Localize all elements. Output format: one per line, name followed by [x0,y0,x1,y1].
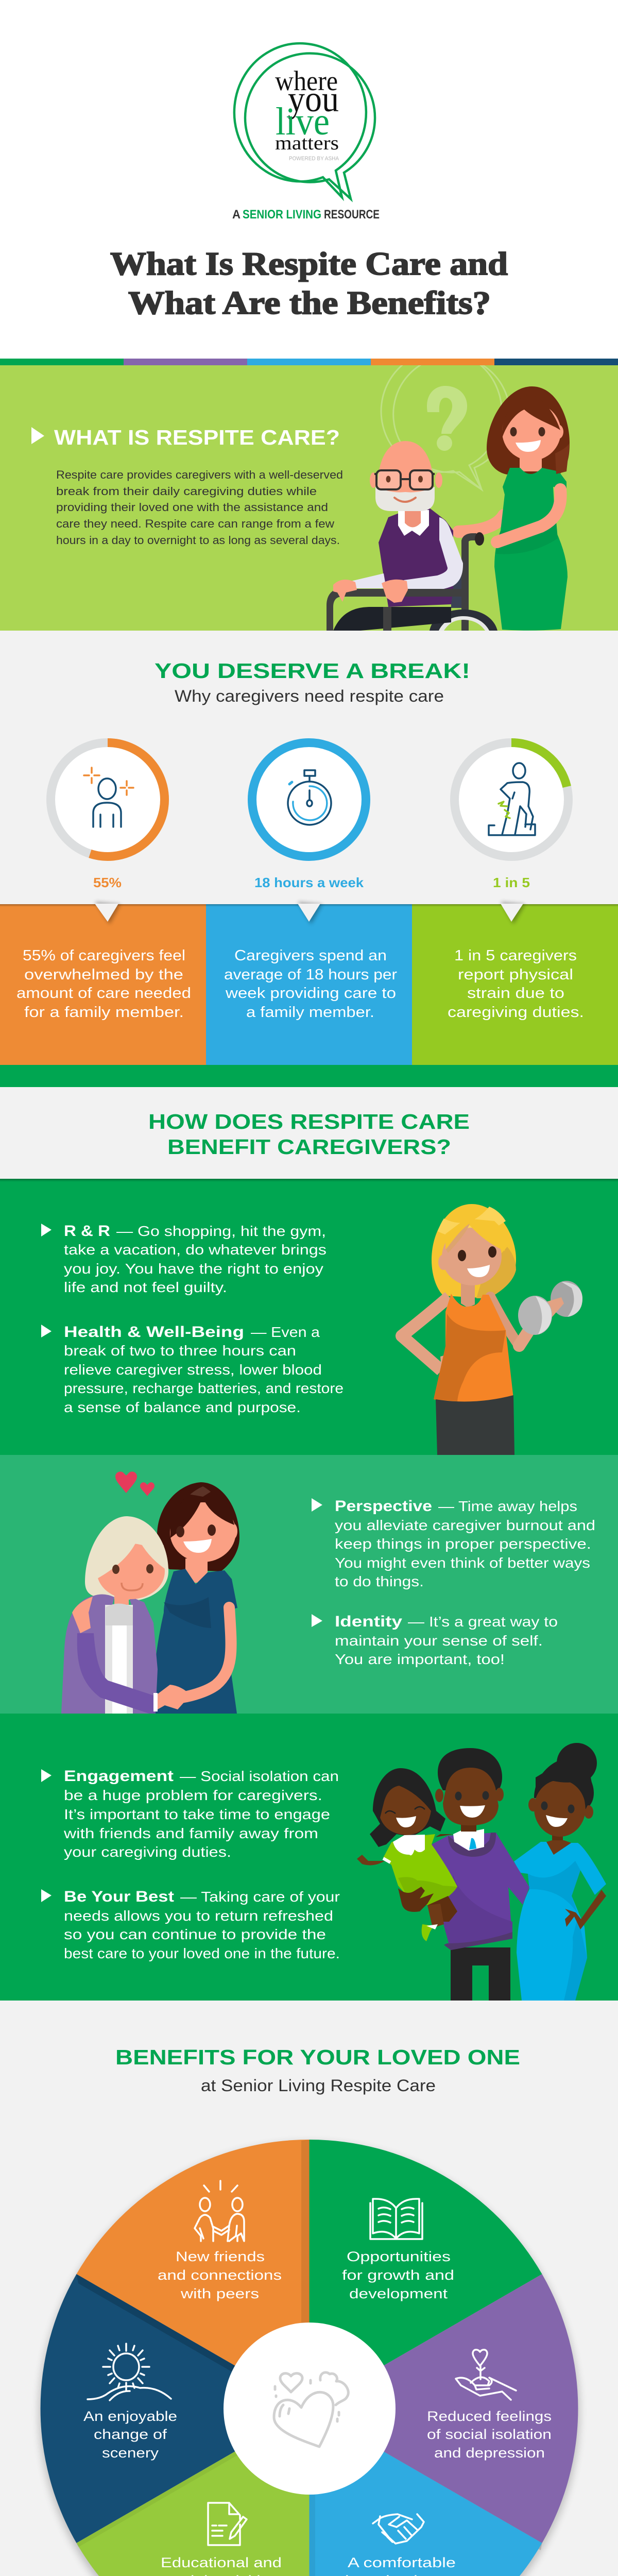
logo: SENIOR LIVING [243,208,321,222]
title: What Are the Benefits? [128,285,491,321]
segment: reduced feelings: of social isolation [427,2427,552,2442]
text: engagement: your caregiving duties. [64,1844,231,1860]
text: engagement: with friends and family away from [63,1825,318,1841]
text: 1 in 5: strain due to [467,985,564,1002]
color bar [0,359,618,365]
text: perspective: — Time away helps [438,1498,577,1514]
text: engagement [41,1768,339,1860]
woman [557,1743,597,1783]
text: identity: Identity [335,1613,402,1630]
icon: hearts [274,2372,348,2447]
text: 55%: amount of care needed [16,985,191,1002]
text: identity: maintain your sense of self. [335,1633,543,1649]
donut: 18 hours a week: 18 hours a week [254,875,364,890]
icon: sun over hill [88,2344,171,2400]
text: health and well-being: relieve caregiver stress, lower blood [64,1362,322,1378]
center circle [224,2323,396,2495]
panel: how does respite care heading [0,1087,618,1179]
icon: book [370,2199,422,2239]
donut: 55% [50,743,165,890]
text: 1 in 5: 1 in 5 caregivers [454,947,577,964]
panel: benefits for your loved one [0,2001,618,2576]
segment: opportunities [309,2140,542,2409]
logo: live [276,100,330,143]
text: engagement: Engagement [64,1768,174,1785]
text: perspective: keep things in proper perspective. [335,1536,591,1552]
wheelchair [451,562,466,608]
text block: hours in a day to overnight to as long as several days. [56,534,340,547]
text: be your best: needs allows you to return refreshed [64,1908,333,1924]
text: health and well-being: — Even a [251,1324,320,1340]
segment: new friends: and connections [158,2267,282,2283]
text block: care they need. Respite care can range from a few [56,517,334,530]
text: engagement: It’s important to take time to engage [64,1806,330,1822]
man [451,1947,510,2001]
illustration: woman with dumbbell [402,1204,582,1455]
text block: Respite care provides caregivers with a well-deserved [56,468,343,481]
segment: new friends [76,2140,309,2409]
text: health and well-being: a sense of balance and purpose. [64,1399,301,1415]
icon: hearts [115,1471,154,1496]
text: identity: — It’s a great way to [408,1614,558,1630]
text: 55%: for a family member. [24,1004,184,1021]
segment: scenery [41,2274,309,2543]
text: perspective: You might even think of better ways [335,1555,590,1571]
logo: where [275,65,338,96]
icon: stopwatch [288,770,331,825]
panel: stat columns [0,902,618,1065]
segment: scenery: scenery [102,2445,159,2461]
icon: overwhelmed person [84,768,133,827]
wheel [39,2140,579,2576]
band [0,1065,618,1087]
text: perspective: you alleviate caregiver burnout and [335,1517,595,1533]
text: health and well-being: pressure, recharge batteries, and restore [64,1380,344,1396]
text: health and well-being: Health & Well-Being [64,1324,244,1341]
segment: reduced feelings: Reduced feelings [427,2409,552,2424]
text: be your best: — Taking care of your [180,1889,340,1905]
logo [232,43,380,222]
girl [435,1834,453,1837]
man [379,508,453,607]
text: R and R [41,1223,327,1295]
text: engagement: be a huge problem for caregivers. [64,1787,322,1803]
segment: new friends: New friends [176,2249,265,2264]
text: R and R: take a vacation, do whatever brings [64,1242,327,1258]
text: 18 hours: Caregivers spend an [234,947,387,964]
donut: 1 in 5: 1 in 5 [493,875,530,890]
text: 1 in 5 [448,947,584,1021]
heading: YOU DESERVE A BREAK! [154,659,470,683]
text: be your best: so you can continue to provide the [64,1926,326,1942]
text: 55% [16,947,191,1021]
segment: opportunities: development [349,2286,448,2301]
segment: educational: Educational and [161,2555,282,2570]
segment: comfortable introduction: A comfortable [348,2555,456,2570]
heading: WHAT IS RESPITE CARE? [54,426,340,449]
icon: friends [195,2181,244,2241]
segment: new friends: with peers [180,2286,259,2301]
illustration: family [357,1743,606,2001]
text: health and well-being: break of two to three hours can [64,1343,296,1359]
text: be your best [41,1888,340,1961]
text: be your best: best care to your loved one in the future. [64,1945,340,1961]
panel: how does respite care heading: HOW DOES RESPITE CARE [148,1110,470,1133]
logo speech bubble [234,43,375,199]
text: 18 hours: a family member. [246,1004,374,1021]
illustration: caregiver and man in wheelchair [327,386,570,631]
text: R and R: R & R [64,1223,110,1240]
segment: opportunities: for growth and [342,2267,454,2283]
panel: R and R, health [0,1179,618,1455]
text: perspective: Perspective [335,1498,432,1515]
icon: document and pencil [208,2503,247,2545]
text: 55%: 55% of caregivers feel [23,947,185,964]
donut: 18 hours a week [252,743,366,890]
text block: break from their daily caregiving duties while [56,485,317,498]
text: R and R: life and not feel guilty. [64,1279,227,1295]
logo: A [232,208,241,222]
illustration: two women [61,1482,239,1716]
text block: providing their loved one with the assistance and [56,501,328,514]
logo: POWERED BY ASHA [289,156,339,162]
logo: you [288,78,339,120]
text: 18 hours: week providing care to [225,985,396,1002]
text: perspective: to do things. [335,1573,424,1589]
text: perspective [312,1498,595,1589]
panel: engagement, be your best [0,1714,618,2001]
text: 18 hours: average of 18 hours per [224,967,397,983]
segment: comfortable introduction [309,2409,542,2576]
segment: scenery: An enjoyable [83,2409,177,2424]
title: What Is Respite Care and [110,246,508,282]
text: 1 in 5: caregiving duties. [448,1004,584,1021]
icon: handshake [373,2514,424,2544]
donut: 55%: 55% [93,875,122,890]
text: R and R: you joy. You have the right to enjoy [64,1261,323,1277]
logo: matters [275,132,339,154]
segment: opportunities: Opportunities [347,2249,451,2264]
text: R and R: — Go shopping, hit the gym, [116,1223,326,1239]
segment: scenery: change of [94,2427,167,2442]
panel: what is respite care [0,350,618,631]
text block [56,468,343,547]
subheading: Why caregivers need respite care [175,687,444,705]
text: 18 hours [224,947,397,1021]
text: be your best: Be Your Best [64,1888,174,1905]
text: health and well-being [41,1324,344,1415]
icon: question bubble [381,350,510,489]
panel: perspective, identity [0,1455,618,1716]
text: identity: You are important, too! [335,1651,505,1667]
text: identity [312,1613,558,1667]
logo: RESOURCE [324,208,380,222]
title [110,246,508,321]
donut: 1 in 5 [454,743,569,890]
segment: reduced feelings [309,2274,578,2550]
segment: reduced feelings: and depression [434,2445,545,2461]
panel: how does respite care heading: BENEFIT CAREGIVERS? [167,1135,451,1159]
segment: educational [76,2409,309,2576]
text: engagement: — Social isolation can [180,1768,339,1784]
text: 1 in 5: report physical [458,967,573,983]
subheading: at Senior Living Respite Care [201,2076,436,2095]
panel: you deserve a break [0,631,618,904]
icon: back strain [489,763,535,835]
text: 55%: overwhelmed by the [24,967,183,983]
icon: heart in hand [456,2350,516,2400]
heading: BENEFITS FOR YOUR LOVED ONE [115,2045,520,2069]
